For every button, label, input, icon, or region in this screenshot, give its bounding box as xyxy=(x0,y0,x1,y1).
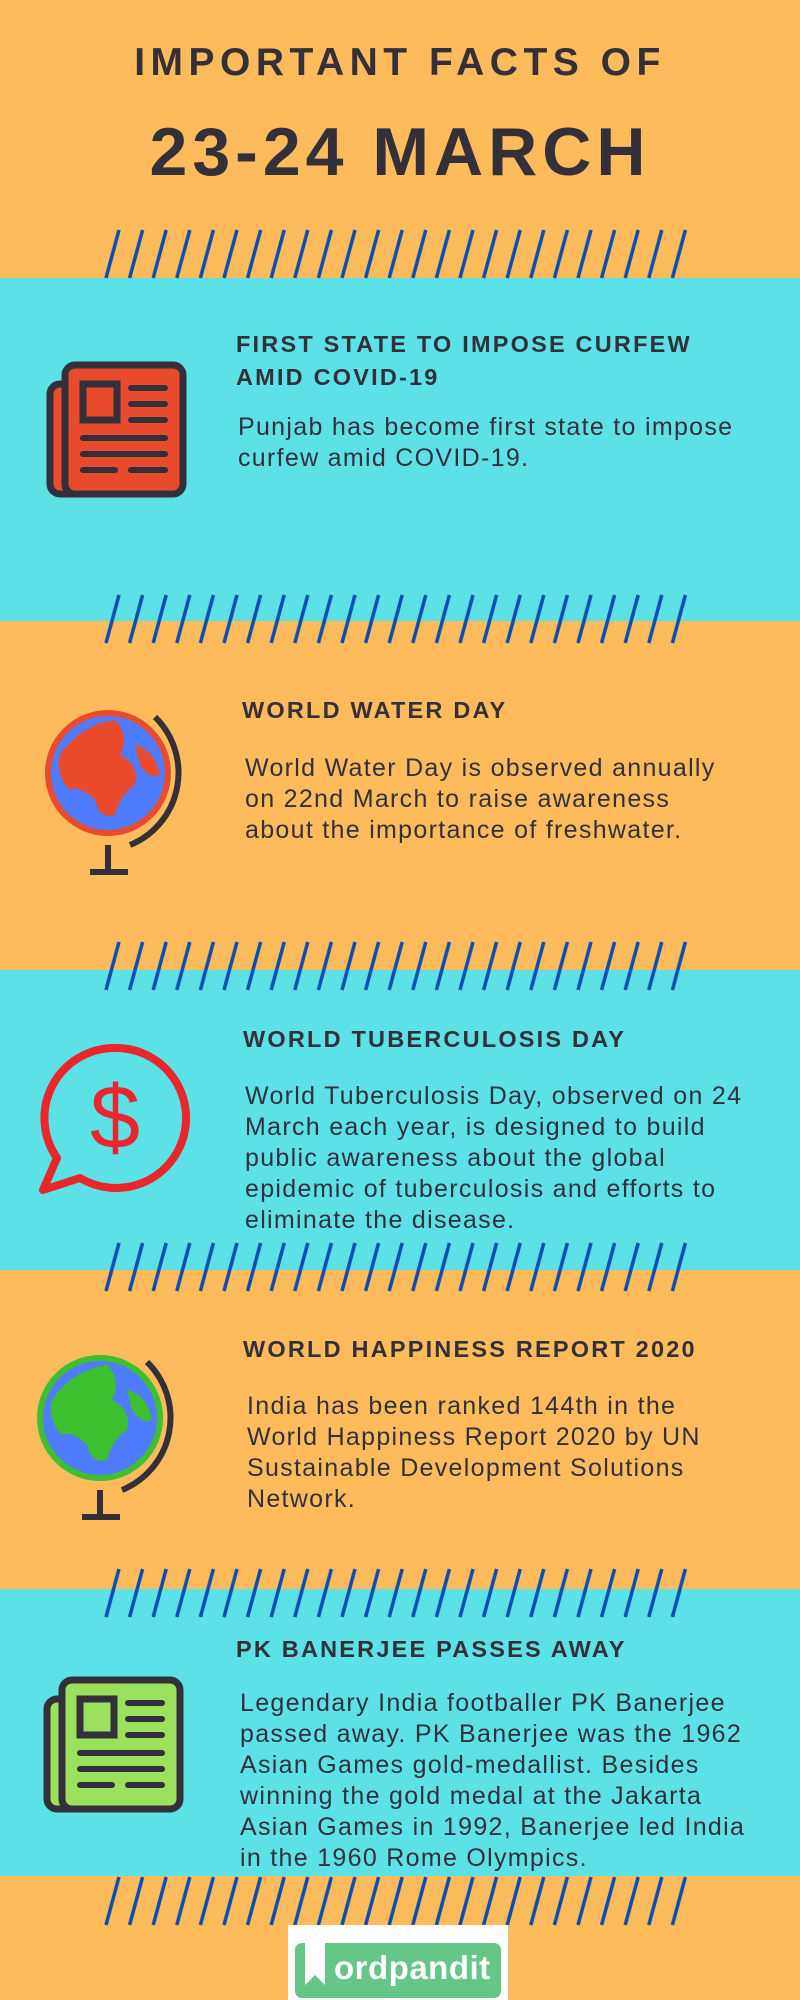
text 2 xyxy=(245,754,716,844)
text 5: Asian Games gold-medallist. Besides xyxy=(240,1751,700,1779)
text 4: Sustainable Development Solutions xyxy=(247,1454,685,1482)
text 4: India has been ranked 144th in the xyxy=(247,1392,676,1420)
text 4: World Happiness Report 2020 by UN xyxy=(247,1423,701,1451)
text 5: winning the gold medal at the Jakarta xyxy=(240,1782,702,1810)
icon: globe red xyxy=(45,710,182,875)
text 2: about the importance of freshwater. xyxy=(245,816,682,844)
text 5 xyxy=(240,1689,745,1872)
text 1 xyxy=(238,413,733,472)
text 2: World Water Day is observed annually xyxy=(245,754,716,782)
heading 3: WORLD TUBERCULOSIS DAY xyxy=(243,1026,626,1052)
icon: speech bubble dollar xyxy=(39,1044,190,1194)
text 2: on 22nd March to raise awareness xyxy=(245,785,670,813)
icon: newspaper green xyxy=(44,1676,184,1812)
heading 1: AMID COVID-19 xyxy=(236,364,440,390)
icon: globe green xyxy=(37,1355,174,1520)
title: 23-24 MARCH xyxy=(150,114,650,190)
text 4: Network. xyxy=(247,1485,356,1513)
heading 1: FIRST STATE TO IMPOSE CURFEW xyxy=(236,331,692,357)
text 3: World Tuberculosis Day, observed on 24 xyxy=(245,1082,742,1110)
heading 4: WORLD HAPPINESS REPORT 2020 xyxy=(243,1336,697,1362)
title: IMPORTANT FACTS OF xyxy=(134,41,666,84)
text 4 xyxy=(247,1392,701,1513)
text 1: Punjab has become first state to impose xyxy=(238,413,733,441)
heading 1 xyxy=(236,331,692,390)
logo: ordpandit xyxy=(334,1949,491,1986)
title xyxy=(134,41,666,190)
icon: speech bubble dollar: $ xyxy=(90,1068,140,1168)
text 3: public awareness about the global xyxy=(245,1144,666,1172)
heading 5: PK BANERJEE PASSES AWAY xyxy=(236,1636,627,1662)
icon: newspaper red xyxy=(46,362,186,498)
text 5: Asian Games in 1992, Banerjee led India xyxy=(240,1813,745,1841)
text 5: passed away. PK Banerjee was the 1962 xyxy=(240,1720,742,1748)
text 1: curfew amid COVID-19. xyxy=(238,444,529,472)
text 5: in the 1960 Rome Olympics. xyxy=(240,1844,588,1872)
text 5: Legendary India footballer PK Banerjee xyxy=(240,1689,726,1717)
text 3: eliminate the disease. xyxy=(245,1206,515,1234)
text 3: March each year, is designed to build xyxy=(245,1113,706,1141)
text 3 xyxy=(245,1082,742,1234)
text 3: epidemic of tuberculosis and efforts to xyxy=(245,1175,716,1203)
heading 2: WORLD WATER DAY xyxy=(242,697,507,723)
logo xyxy=(288,1925,508,2000)
